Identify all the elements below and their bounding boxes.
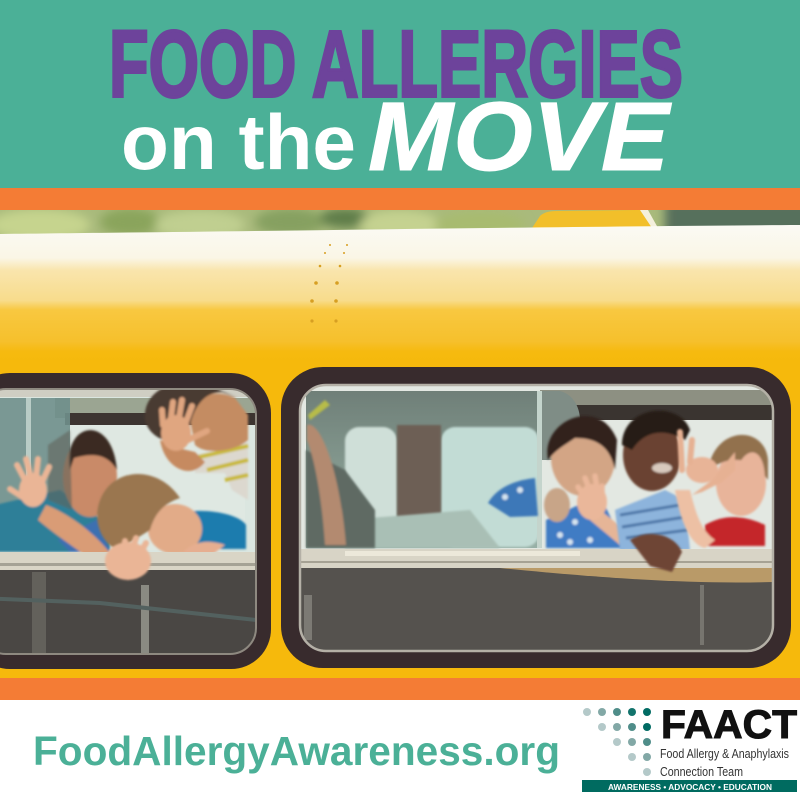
left window <box>0 373 271 669</box>
logo tagline bar <box>582 780 797 792</box>
child: girl with polka dot shirt <box>488 416 625 548</box>
bus roof <box>0 225 800 362</box>
logo full name line 2: Connection Team <box>660 765 743 779</box>
hand over sill <box>630 534 682 572</box>
left window rubber frame <box>0 373 271 669</box>
header band <box>0 0 800 188</box>
bus roof hatch <box>532 210 658 228</box>
background foliage <box>0 210 800 234</box>
bus side panel <box>0 360 800 678</box>
logo wordmark: FAACT <box>661 703 797 747</box>
subtitle: on the: on the <box>121 98 356 186</box>
icon: dot triangle <box>583 708 651 776</box>
subtitle: move: MOVE <box>368 82 672 191</box>
child: boy with curly hair <box>145 383 248 500</box>
website url: FoodAllergyAwareness.org <box>33 728 560 774</box>
photo: school bus with waving children <box>0 200 800 678</box>
frosted sliding pane <box>306 391 540 548</box>
right window <box>281 367 791 668</box>
window sill <box>0 552 256 570</box>
bottom orange stripe <box>0 678 800 700</box>
child at far left of window <box>306 400 375 548</box>
lower window glass <box>0 570 256 660</box>
window sill <box>300 549 773 568</box>
child: boy in striped shirt <box>615 411 690 550</box>
left window interior <box>0 383 256 660</box>
child: blond boy <box>96 472 248 552</box>
lower window glass <box>300 568 773 653</box>
right window rubber frame <box>281 367 791 668</box>
roof rivet seam <box>310 244 348 323</box>
right window chrome edge <box>300 385 773 651</box>
right window interior <box>300 385 773 653</box>
child: red haired boy in red shirt <box>675 432 768 548</box>
left window chrome edge <box>0 389 256 654</box>
top orange stripe <box>0 188 800 210</box>
waving hand on sill <box>105 538 151 580</box>
child: boy behind glass <box>0 430 117 557</box>
logo tagline: AWARENESS • ADVOCACY • EDUCATION <box>608 782 772 792</box>
faact logo <box>582 703 797 792</box>
